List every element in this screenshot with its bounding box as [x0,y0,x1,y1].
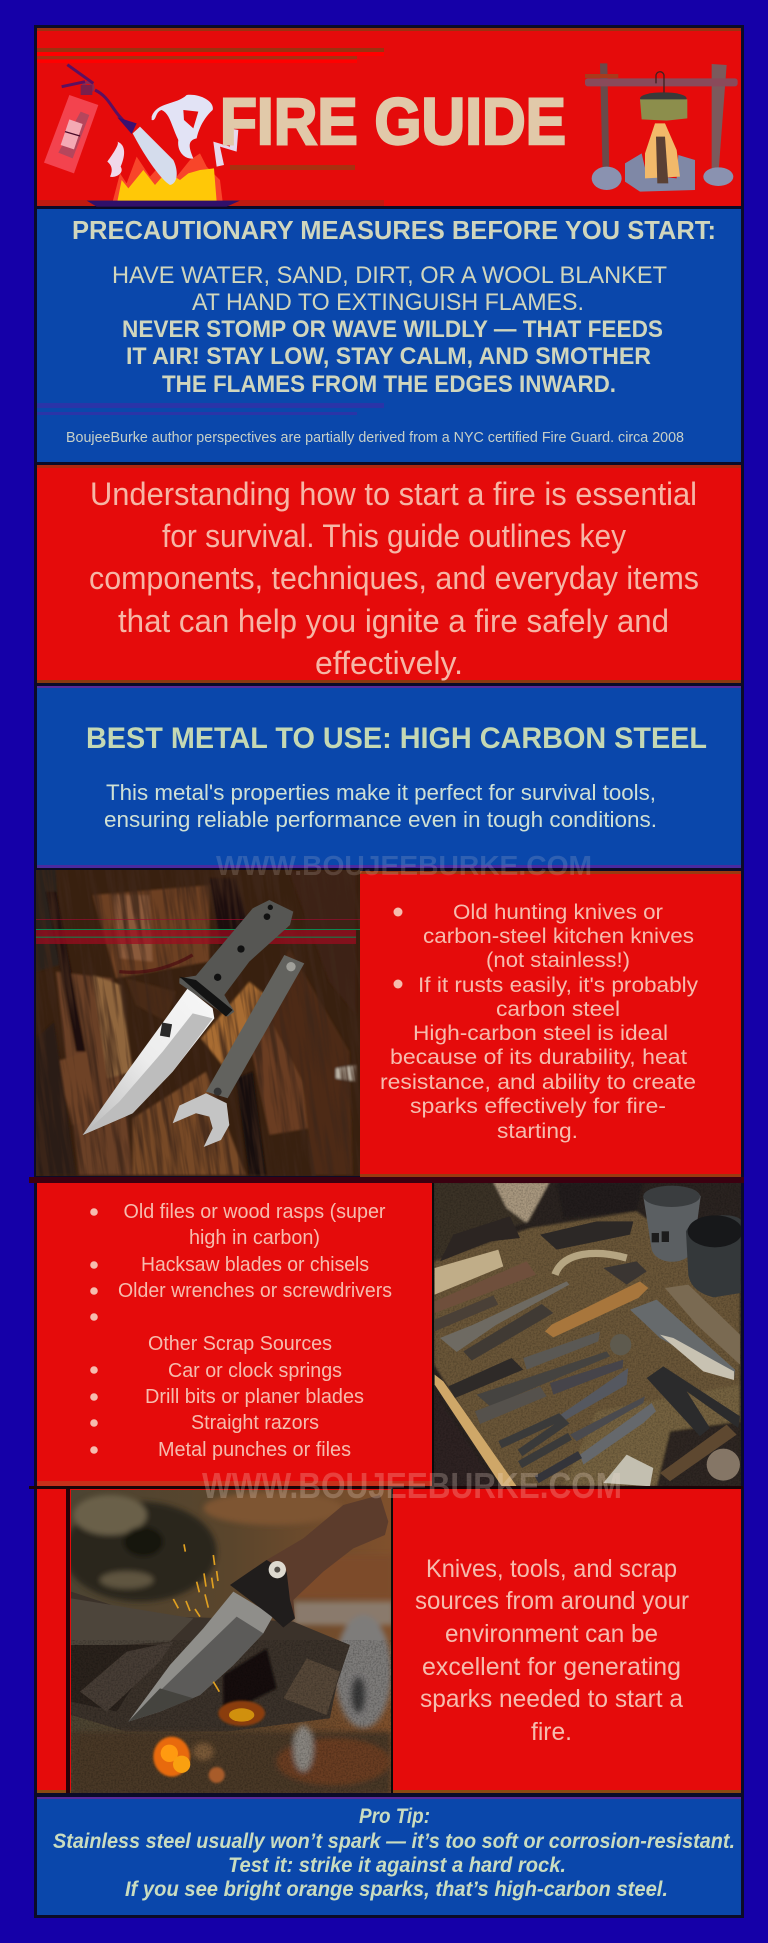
photo frame [432,1183,434,1487]
text block: intro: effectively. [315,645,463,681]
photo: knife striking rock with sparks [63,1490,393,1795]
text block: why high-carbon steel: starting. [497,1120,578,1143]
bullet list: scrap sources [90,1201,392,1461]
text block: safety instructions: IT AIR! STAY LOW, STAY CALM, AND SMOTHER [126,343,651,370]
text block: metal properties: ensuring reliable performance even in tough conditions. [104,807,657,832]
title: FIRE GUIDE [220,84,566,158]
lower knives [558,1368,628,1421]
wooden handle [545,1281,648,1337]
panel: sparks section [37,1489,741,1795]
text block: sparks [415,1555,689,1746]
bullet list: scrap sources: Metal punches or files [158,1439,351,1461]
bullet list: scrap sources: Older wrenches or screwdrivers [118,1280,392,1302]
photo: assorted tools on workbench [434,1182,742,1487]
attribution note: BoujeeBurke author perspectives are partially derived from a NYC certified Fire Guard. circa 2008 [66,430,684,446]
foreground blur [71,1725,391,1795]
bullet list: knife sources: carbon-steel kitchen knives [423,925,694,948]
text block: pro tip: If you see bright orange sparks, that’s high-carbon steel. [125,1878,668,1901]
bullet list: scrap sources: Straight razors [191,1412,319,1434]
photo: knife and wrench on wood [36,870,360,1176]
bullet list: knife sources: If it rusts easily, it's probably [418,974,699,997]
text block: intro [89,476,699,681]
knife blade [83,988,214,1135]
bullet list: knife sources: (not stainless!) [486,949,630,972]
text block: sparks: sources from around your [415,1587,689,1615]
text block: safety instructions: NEVER STOMP OR WAVE WILDLY — THAT FEEDS [122,316,663,343]
text block: sparks: sparks needed to start a [420,1685,683,1713]
icon: campfire with cooking pot [585,63,738,192]
text block: intro: components, techniques, and everyday items [89,560,699,596]
panel: pro tip [37,1797,741,1915]
text block: safety instructions [112,262,667,398]
text block: intro: Understanding how to start a fire is essential [90,476,697,512]
panel: best metal [37,686,741,868]
text block: safety instructions: AT HAND TO EXTINGUISH FLAMES. [192,289,584,316]
bullet list: scrap sources: Drill bits or planer blades [145,1386,364,1408]
upper left tool handles [435,1250,503,1295]
panel: introduction [37,465,741,683]
text block: why high-carbon steel [380,1022,696,1143]
ember [153,1737,190,1777]
bullet list: scrap sources: Car or clock springs [168,1360,342,1382]
heading: BEST METAL TO USE: HIGH CARBON STEEL [86,722,707,755]
table edge [435,1375,517,1486]
glitch band [36,930,356,944]
canisters [643,1195,701,1262]
text block: pro tip: Test it: strike it against a hard rock. [228,1854,566,1877]
text block: safety instructions: THE FLAMES FROM THE EDGES INWARD. [162,371,616,398]
text block: sparks: excellent for generating [422,1653,681,1681]
text block: why high-carbon steel: resistance, and ability to create [380,1071,696,1094]
text block: why high-carbon steel: High-carbon steel is ideal [413,1022,668,1045]
icon: fire extinguisher [44,65,240,207]
text block: pro tip: Stainless steel usually won’t spark — it’s too soft or corrosion-resistant. [53,1830,735,1853]
middle knives [448,1358,523,1398]
pliers [647,1366,740,1436]
blade [128,1592,273,1722]
text block: sparks: Knives, tools, and scrap [426,1555,677,1583]
wrench [206,955,304,1098]
panel: precautionary measures [37,209,741,462]
sparks [173,1544,219,1692]
guard and handle [267,1495,388,1620]
watermark: bottom: WWW.BOUJEEBURKE.COM [202,1465,622,1506]
text block: safety instructions: HAVE WATER, SAND, DIRT, OR A WOOL BLANKET [112,262,667,289]
rope [555,1253,627,1275]
bullet list: knife sources [394,901,699,1021]
bullet list: knife sources: Old hunting knives or [453,901,663,924]
panel: scrap sources text [37,1183,432,1487]
divider [29,1486,743,1489]
text block: sparks: fire. [531,1718,572,1746]
watermark: top: WWW.BOUJEEBURKE.COM [216,850,592,881]
text block: metal properties [104,780,657,832]
flat knife [630,1300,735,1380]
panel: title banner [37,28,741,207]
knife handle [179,900,293,1017]
bullet list: scrap sources: high in carbon) [189,1227,320,1249]
text block: intro: that can help you ignite a fire safely and [118,603,669,639]
text block: intro: for survival. This guide outlines key [162,518,626,554]
bullet list: scrap sources: Other Scrap Sources [148,1333,332,1355]
text block: why high-carbon steel: because of its durability, heat [390,1046,687,1069]
heading: PRECAUTIONARY MEASURES BEFORE YOU START: [72,215,716,245]
text block: sparks: environment can be [445,1620,658,1648]
bullet list: scrap sources: Old files or wood rasps (super [124,1201,386,1223]
text block: why high-carbon steel: sparks effectively for fire- [410,1095,666,1118]
bullet list: scrap sources: Hacksaw blades or chisels [141,1254,369,1276]
divider [29,1177,744,1183]
text block: pro tip: Pro Tip: [359,1805,430,1828]
rock [71,1592,350,1732]
bullet list: knife sources: carbon steel [496,998,620,1021]
text block: metal properties: This metal's properties make it perfect for survival tools, [106,780,656,805]
panel: knives text [360,871,741,1177]
text block: pro tip [53,1805,735,1901]
